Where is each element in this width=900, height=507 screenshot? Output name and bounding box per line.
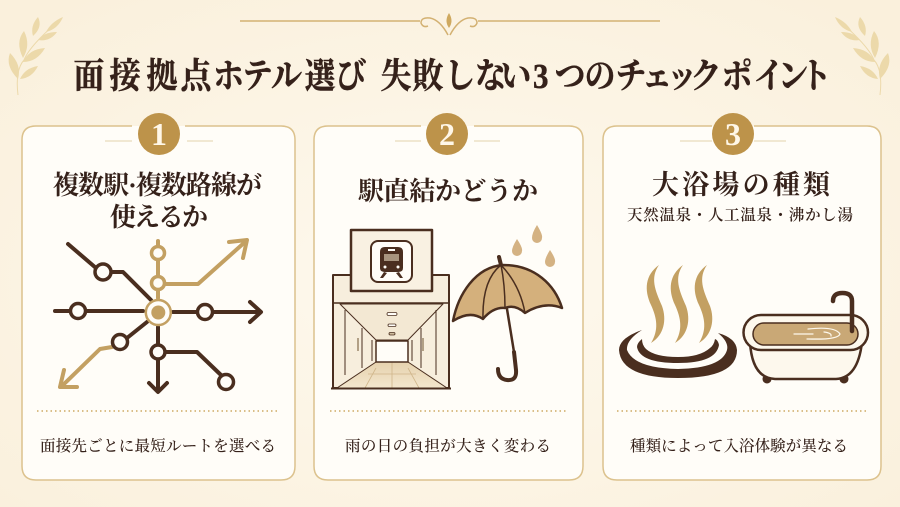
heading: card 1: 複数駅·複数路線が (53, 171, 262, 200)
icon: bathtub with faucet (744, 293, 868, 384)
icon: station building and tunnel (331, 230, 451, 388)
badge 3: 3 (725, 116, 741, 152)
heading: card 1 (53, 171, 262, 232)
caption: card 2: 雨の日の負担が大きく変わる (345, 437, 551, 455)
badge 2 (395, 113, 500, 155)
panel: card 3 bath types (603, 113, 881, 480)
heading: card 3: 天然温泉・人工温泉・沸かし湯 (627, 205, 853, 224)
icon: right laurel sprig (835, 17, 889, 95)
badge 3 (680, 113, 786, 155)
top ornament (240, 13, 660, 35)
badge 1 (105, 113, 213, 155)
card 1 frame (22, 126, 295, 480)
badge 2: 2 (439, 116, 455, 152)
heading: card 3: 大浴場の種類 (652, 170, 832, 200)
icon: route map (55, 240, 261, 392)
panel: card 2 direct station connection (314, 113, 583, 480)
heading: card 2: 駅直結かどうか (357, 177, 538, 206)
icon: left laurel sprig (9, 17, 63, 95)
card 2 frame (314, 126, 583, 480)
badge 1: 1 (151, 116, 167, 152)
title: 面接拠点ホテル選び 失敗しない3つのチェックポイント (74, 57, 831, 97)
icon: hot spring symbol (619, 265, 737, 378)
icon: train pictogram (380, 247, 403, 278)
card 3 frame (603, 126, 881, 480)
heading: card 1: 使えるか (110, 203, 208, 232)
panel: card 1 multiple stations (22, 113, 295, 480)
heading: card 3 (627, 170, 853, 224)
icon: umbrella and raindrops (453, 225, 562, 380)
caption: card 1: 面接先ごとに最短ルートを選べる (40, 436, 276, 455)
caption: card 3: 種類によって入浴体験が異なる (630, 437, 848, 455)
